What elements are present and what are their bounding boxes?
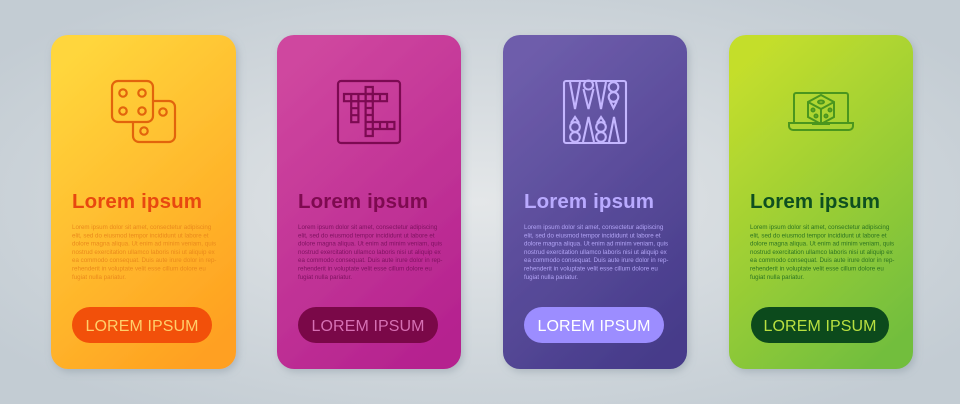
button [72,307,212,343]
body text: ea commodo consequat. Duis aute irure dolor in rep- [524,257,668,264]
button: LOREM IPSUM [86,318,198,335]
body text: fugiat nulla pariatur. [750,274,804,281]
button [751,307,889,343]
body text: fugiat nulla pariatur. [72,274,126,281]
button: LOREM IPSUM [312,318,424,335]
body text: dolore magna aliqua. Ut enim ad minim veniam, quis [524,241,668,248]
body text: fugiat nulla pariatur. [524,274,578,281]
body text: rehenderit in voluptate velit esse cillum dolore eu [750,266,884,272]
body text: nostrud exercitation ullamco laboris nisi ut aliquip ex [298,249,442,256]
icon: dice [112,81,175,142]
body text: Lorem ipsum dolor sit amet, consectetur adipiscing [298,224,438,231]
panel: purple backgammon card [503,35,687,369]
heading: Lorem ipsum [524,190,654,213]
icon: backgammon board [564,80,626,143]
body text: rehenderit in voluptate velit esse cillum dolore eu [298,266,432,272]
body text: Lorem ipsum dolor sit amet, consectetur adipiscing [750,224,890,231]
heading: Lorem ipsum [750,190,880,213]
body text: nostrud exercitation ullamco laboris nisi ut aliquip ex [524,249,668,256]
body text: Lorem ipsum dolor sit amet, consectetur adipiscing [524,224,664,231]
button [298,307,438,343]
body text: elit, sed do eiusmod tempor incididunt ut labore et [750,232,887,239]
body text: ea commodo consequat. Duis aute irure dolor in rep- [750,257,894,264]
body text: nostrud exercitation ullamco laboris nisi ut aliquip ex [750,249,894,256]
body text: dolore magna aliqua. Ut enim ad minim veniam, quis [750,241,894,248]
panel: green laptop card [729,35,913,369]
body text: dolore magna aliqua. Ut enim ad minim veniam, quis [298,241,442,248]
button: LOREM IPSUM [764,318,876,335]
icon: laptop with dice [789,93,853,130]
body text: Lorem ipsum dolor sit amet, consectetur adipiscing [72,224,212,231]
icon: crossword [338,81,400,143]
body text: nostrud exercitation ullamco laboris nisi ut aliquip ex [72,249,216,256]
body text: elit, sed do eiusmod tempor incididunt ut labore et [72,232,209,239]
panel: orange dice card [51,35,236,369]
panel: magenta crossword card [277,35,461,369]
body text: elit, sed do eiusmod tempor incididunt ut labore et [524,232,661,239]
body text: fugiat nulla pariatur. [298,274,352,281]
button: LOREM IPSUM [538,318,650,335]
body text: ea commodo consequat. Duis aute irure dolor in rep- [72,257,216,264]
heading: Lorem ipsum [72,190,202,213]
body text: rehenderit in voluptate velit esse cillum dolore eu [524,266,658,272]
heading: Lorem ipsum [298,190,428,213]
body text: rehenderit in voluptate velit esse cillum dolore eu [72,266,206,272]
body text: dolore magna aliqua. Ut enim ad minim veniam, quis [72,241,216,248]
button [524,307,664,343]
body text: ea commodo consequat. Duis aute irure dolor in rep- [298,257,442,264]
body text: elit, sed do eiusmod tempor incididunt ut labore et [298,232,435,239]
